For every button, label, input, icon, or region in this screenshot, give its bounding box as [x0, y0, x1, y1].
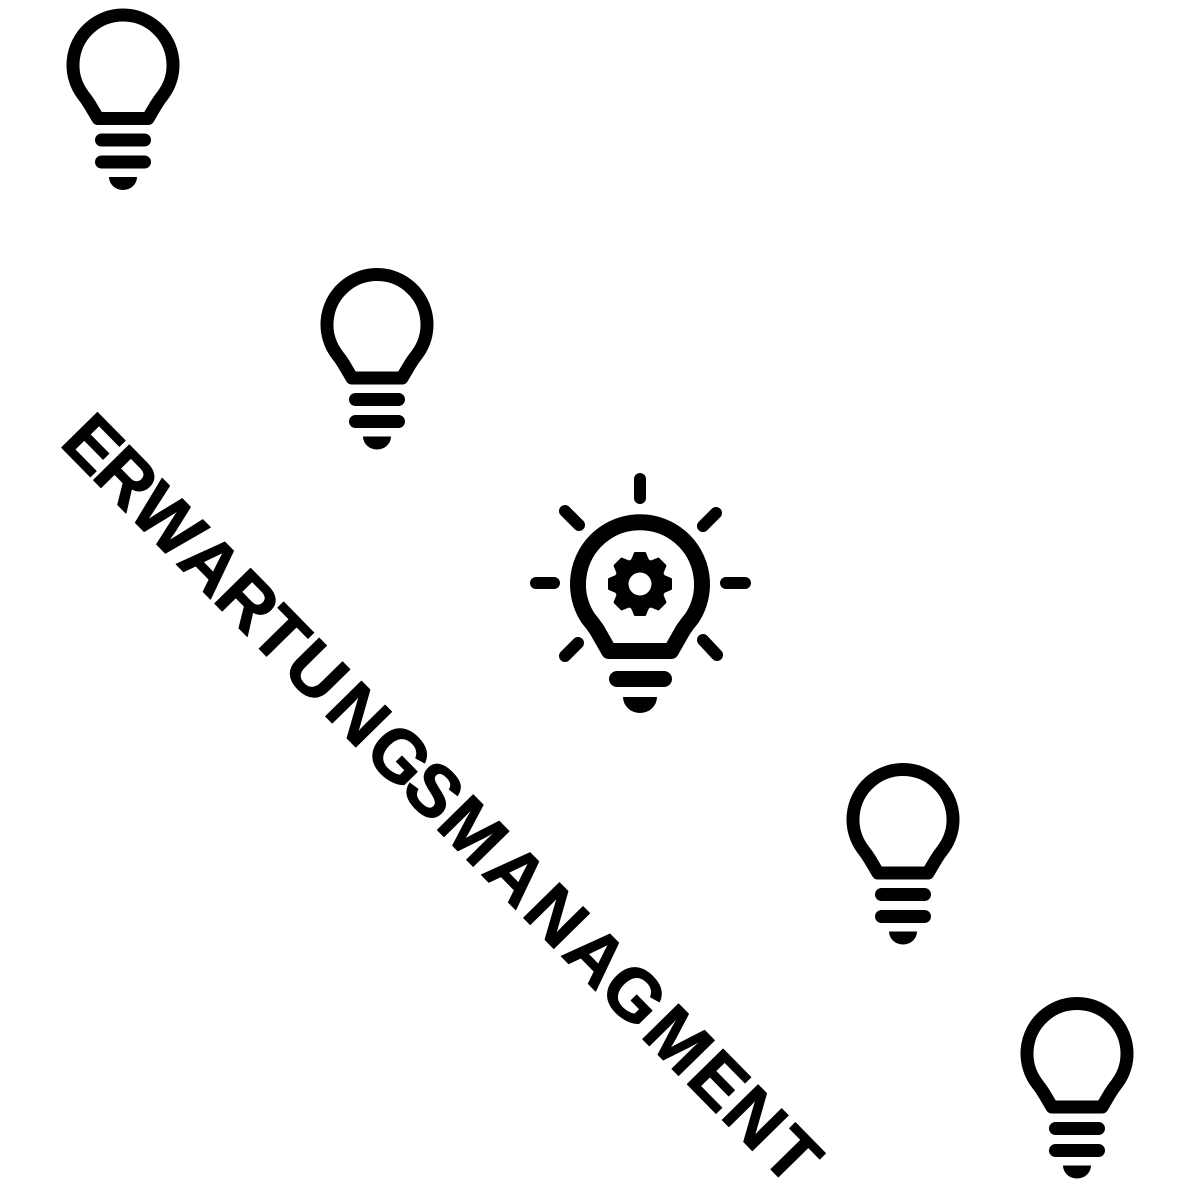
- icon: light bulb 2: [327, 274, 427, 450]
- icon: light bulb 1: [73, 15, 173, 190]
- icon: light bulb with gear and rays: [536, 479, 745, 713]
- icon: light bulb 4: [1027, 1004, 1127, 1178]
- icon: rays: [536, 479, 745, 656]
- icon: light bulb 3: [853, 770, 953, 944]
- icon: bulb outline: [578, 522, 702, 651]
- icon: bulb base: [609, 671, 672, 687]
- icon: bulb tip: [623, 697, 657, 713]
- title: diagonal text: ERWARTUNGSMANAGMENT: [47, 399, 837, 1200]
- icon: gear: [609, 553, 671, 615]
